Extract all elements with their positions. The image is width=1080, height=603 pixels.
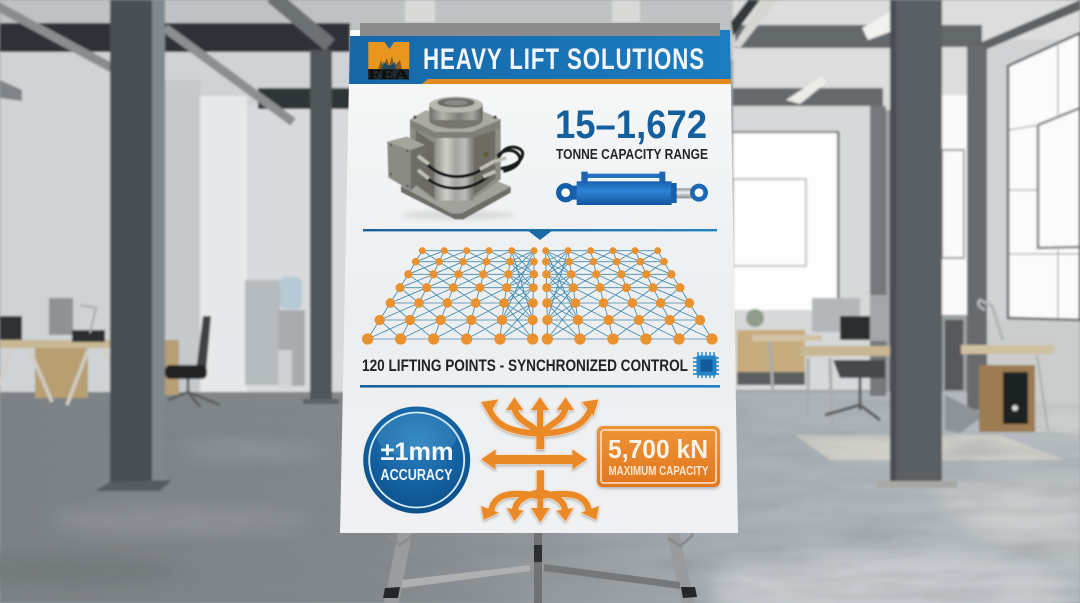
chair xyxy=(165,340,179,395)
network diagram: lifting points xyxy=(368,251,712,339)
top rail of easel xyxy=(360,23,720,36)
ceiling xyxy=(0,0,1080,60)
easel clamps xyxy=(383,587,400,598)
accuracy label: ACCURACY xyxy=(380,467,453,484)
pipes xyxy=(0,5,112,68)
logo: M FEA: FEA xyxy=(368,67,409,82)
back wall left xyxy=(0,50,350,400)
base plate xyxy=(401,186,511,219)
icon: hydraulic jack xyxy=(387,97,523,220)
capacity label: MAXIMUM CAPACITY xyxy=(608,464,709,478)
icon: blue hydraulic cylinder xyxy=(556,172,708,205)
load distribution arrows xyxy=(481,397,599,523)
left steel pillars xyxy=(310,50,332,402)
divider xyxy=(360,385,720,388)
capacity callout xyxy=(597,426,720,487)
accuracy value: ±1mm xyxy=(380,438,454,466)
back wall right xyxy=(733,105,873,390)
fittings xyxy=(418,156,506,179)
divider with pointer xyxy=(363,229,717,240)
windows xyxy=(733,132,839,310)
header orange stripe xyxy=(422,79,731,84)
top cylinder xyxy=(429,111,483,129)
accuracy badge xyxy=(363,406,470,514)
capacity range label: TONNE CAPACITY RANGE xyxy=(556,147,708,163)
right grid links xyxy=(546,251,712,339)
right office furniture xyxy=(737,330,805,372)
left grid links xyxy=(368,251,534,339)
easel legs xyxy=(384,533,412,603)
header banner xyxy=(349,30,731,84)
lifting point nodes xyxy=(368,251,712,339)
side panels xyxy=(416,131,434,199)
floor mottling xyxy=(0,400,1080,603)
arrows fanning upward xyxy=(481,397,598,449)
capacity range figure: 15–1,672 xyxy=(555,103,707,147)
double-headed horizontal arrow xyxy=(481,449,587,470)
network caption: 120 LIFTING POINTS - SYNCHRONIZED CONTROL xyxy=(362,356,688,375)
capacity value: 5,700 kN xyxy=(608,434,708,464)
white wall column xyxy=(165,80,201,395)
header background xyxy=(349,30,731,84)
icon: microchip xyxy=(693,352,719,378)
water cooler xyxy=(245,280,280,385)
top flange xyxy=(410,119,501,138)
right steel pillar xyxy=(890,0,942,482)
body xyxy=(410,125,501,201)
left desk area xyxy=(35,348,88,398)
ceiling lights xyxy=(862,12,890,40)
easel xyxy=(383,527,697,603)
title: HEAVY LIFT SOLUTIONS xyxy=(423,43,705,76)
junction box xyxy=(387,137,425,150)
floor xyxy=(0,392,1080,603)
hoses xyxy=(423,147,523,188)
poster board xyxy=(340,30,738,533)
beams xyxy=(0,23,112,52)
right columns xyxy=(870,106,886,396)
arrows fanning downward xyxy=(481,470,599,523)
contact shadow xyxy=(402,210,515,220)
logo: M FEA xyxy=(368,42,409,82)
central barrel xyxy=(435,136,473,201)
easel braces xyxy=(402,565,530,588)
